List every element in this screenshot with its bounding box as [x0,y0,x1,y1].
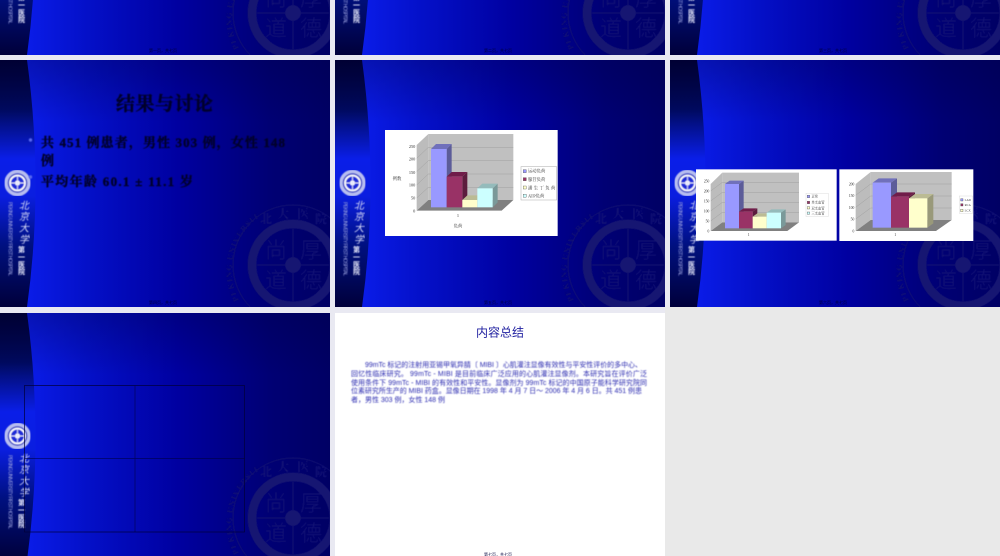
watermark seal: 道 [265,516,287,548]
footer: 第二页，共七页 [484,47,512,53]
hospital name [6,453,28,529]
axis labels: 50 [851,218,855,222]
hospital name: 第一医院 [18,498,25,529]
summary paragraph: 使用条件下 99mTc - MIBI 的有效性和平安性。显像剂为 99mTc 标记的中国原子能科学研究院同 [351,378,647,387]
watermark seal: 尚 [265,486,287,518]
axis labels: 0 [413,208,415,213]
hospital name: 第一医院 [688,245,695,276]
hospital name: 北京大学 [16,200,28,244]
summary paragraph: 回忆性临床研究。 99mTc - MIBI 是目前临床广泛应用的心肌灌注显像剂。本研究旨在评价广泛 [351,369,647,378]
legend: RCA [965,203,972,207]
hospital logo [6,424,29,448]
legend: ATP负荷 [528,193,545,200]
watermark seal: 德 [970,11,992,43]
axis labels: 100 [409,183,415,188]
watermark seal: 道 [600,263,622,295]
watermark seal: 院 [650,210,662,227]
watermark seal: 大 [612,205,624,222]
footer: 第四页，共七页 [149,299,177,305]
axis labels: 100 [849,206,855,210]
slide 4: results and discussion [0,60,330,307]
axis labels: 200 [409,157,415,162]
watermark seal: 德 [635,11,657,43]
hospital name [676,200,698,276]
watermark seal: 北 [260,210,272,227]
watermark seal: 厚 [300,233,322,265]
watermark seal: 道 [600,11,622,43]
watermark seal [226,0,330,55]
watermark seal: PEKING UNIVERSITY [226,467,258,554]
watermark seal: 道 [935,11,957,43]
watermark seal [562,204,665,307]
axis labels: 200 [704,190,710,194]
bullet list: 平均年龄 60.1 ± 11.1 岁 [41,174,193,189]
watermark seal: 厚 [970,233,992,265]
legend: 单支血管 [811,200,825,205]
watermark seal: 道 [265,11,287,43]
watermark seal: 厚 [635,233,657,265]
watermark seal: 大 [277,458,289,475]
bullet list: 例 [41,153,54,168]
watermark seal: 医 [967,205,979,222]
axis labels: 150 [849,194,855,198]
hospital name: 北京大学 [686,200,698,244]
axis labels: 0 [853,229,855,233]
watermark seal: 尚 [600,233,622,265]
watermark seal: PEKING UNIVERSITY [896,241,908,302]
watermark seal: 北 [930,210,942,227]
axis labels: 负荷 [454,222,463,229]
watermark seal: 德 [300,11,322,43]
watermark seal: 尚 [265,233,287,265]
axis labels: 0 [708,229,710,233]
watermark seal: 德 [970,263,992,295]
summary paragraph: 99mTc 标记的注射用亚锡甲氧异腈〔 MIBI 〕心肌灌注显像有效性与平安性评价的多中心、 [365,360,642,369]
legend [806,193,828,217]
bars [431,144,498,207]
summary heading: 内容总结 [476,324,524,340]
legend: 腺苷负荷 [528,176,546,183]
hospital name: 第一医院 [18,245,25,276]
axis labels: 1 [457,213,459,218]
watermark seal: 尚 [935,233,957,265]
watermark seal [226,204,330,307]
slide 6: perfusion charts [670,60,1000,307]
watermark seal: PEKING UNIVERSITY [562,214,592,302]
axis labels: 1 [894,233,896,237]
axis labels: 100 [704,210,710,214]
hospital name: PEKING UNIVERSITY FIRST HOSPITAL [342,202,348,276]
hospital name [342,200,364,276]
hospital name: 第一医院 [352,245,360,276]
hospital logo [341,172,364,194]
axis labels: 250 [409,144,415,149]
watermark seal: 德 [635,263,657,295]
summary paragraph [351,360,647,404]
legend: 正常 [811,194,819,199]
hospital logo [676,172,699,194]
legend [959,196,973,213]
summary paragraph: 者，男性 303 例，女性 148 例 [351,395,445,404]
watermark seal: 医 [297,458,309,475]
watermark seal [896,205,1000,307]
axis labels: 1 [748,233,750,237]
watermark seal [896,0,1000,55]
hospital name: 北京大学 [352,200,364,244]
bullet list: 共 451 例患者，男性 303 例，女性 148 [41,135,286,151]
slide 2: blank template slide [335,0,665,55]
empty grey area [665,307,1000,556]
watermark seal: 道 [265,263,287,295]
bullet list [29,135,286,189]
axis labels: 150 [409,170,415,175]
heading: 结果与讨论 [116,93,213,115]
watermark seal: 北 [595,210,607,227]
hospital name [6,0,28,24]
watermark seal: 院 [985,210,997,227]
hospital name: PEKING UNIVERSITY FIRST HOSPITAL [676,202,682,276]
watermark seal: 厚 [300,486,322,518]
bars [725,181,786,228]
legend [521,167,557,200]
axis labels [704,180,750,237]
axis labels [393,144,463,229]
watermark seal: 医 [632,205,644,222]
footer: 第一页，共七页 [149,47,177,53]
slide 5: load type chart [335,60,665,307]
watermark seal: 院 [315,210,327,227]
legend: LCX [965,209,971,213]
watermark seal: 北 [260,463,272,480]
footer: 第六页，共七页 [819,299,847,305]
hospital name: PEKING UNIVERSITY FIRST HOSPITAL [6,455,12,529]
slide 3: blank template slide [670,0,1000,55]
hospital name: 北京大学 [16,453,28,497]
3D bar chart: coronary territory [839,169,973,241]
axis labels: 200 [849,182,855,186]
legend: 潘生丁负荷 [528,184,556,191]
hospital name [6,200,28,276]
footer: 第五页，共七页 [484,299,512,305]
empty table grid [24,386,244,532]
axis labels: 50 [411,195,415,200]
watermark seal [562,0,665,55]
bars [873,178,933,228]
axis labels: 150 [704,200,710,204]
3D bar chart: vessel disease [696,169,837,241]
hospital logo [6,172,29,194]
hospital name [676,0,698,24]
axis labels: 50 [706,220,710,224]
3D bar chart: load type [385,130,558,236]
watermark seal: 大 [947,205,959,222]
watermark seal: PEKING UNIVERSITY [226,214,258,302]
watermark seal: 道 [935,263,957,295]
legend: 双支血管 [811,205,825,210]
watermark seal: 院 [315,463,327,480]
watermark seal: 德 [300,516,322,548]
watermark seal: 德 [300,263,322,295]
axis labels [849,182,896,237]
watermark seal [226,457,330,556]
watermark seal: 大 [277,205,289,222]
summary paragraph: 位素研究所生产的 MIBI 药盒。显像日期在 1998 年 4 月 7 日～ 2006 年 4 月 6 日。共 451 例患 [351,386,642,395]
summary slide [335,313,665,556]
footer: 第三页，共七页 [819,47,847,53]
watermark seal: 医 [297,205,309,222]
axis labels: 例数 [393,175,402,182]
hospital name: PEKING UNIVERSITY FIRST HOSPITAL [6,202,12,276]
hospital name [342,0,364,24]
legend: 三支血管 [811,211,825,216]
axis labels: 250 [704,180,710,184]
slide 1: blank template slide [0,0,330,55]
legend: 运动负荷 [528,168,546,175]
legend: LAD [965,198,972,202]
slide 7: empty table slide [0,313,330,556]
